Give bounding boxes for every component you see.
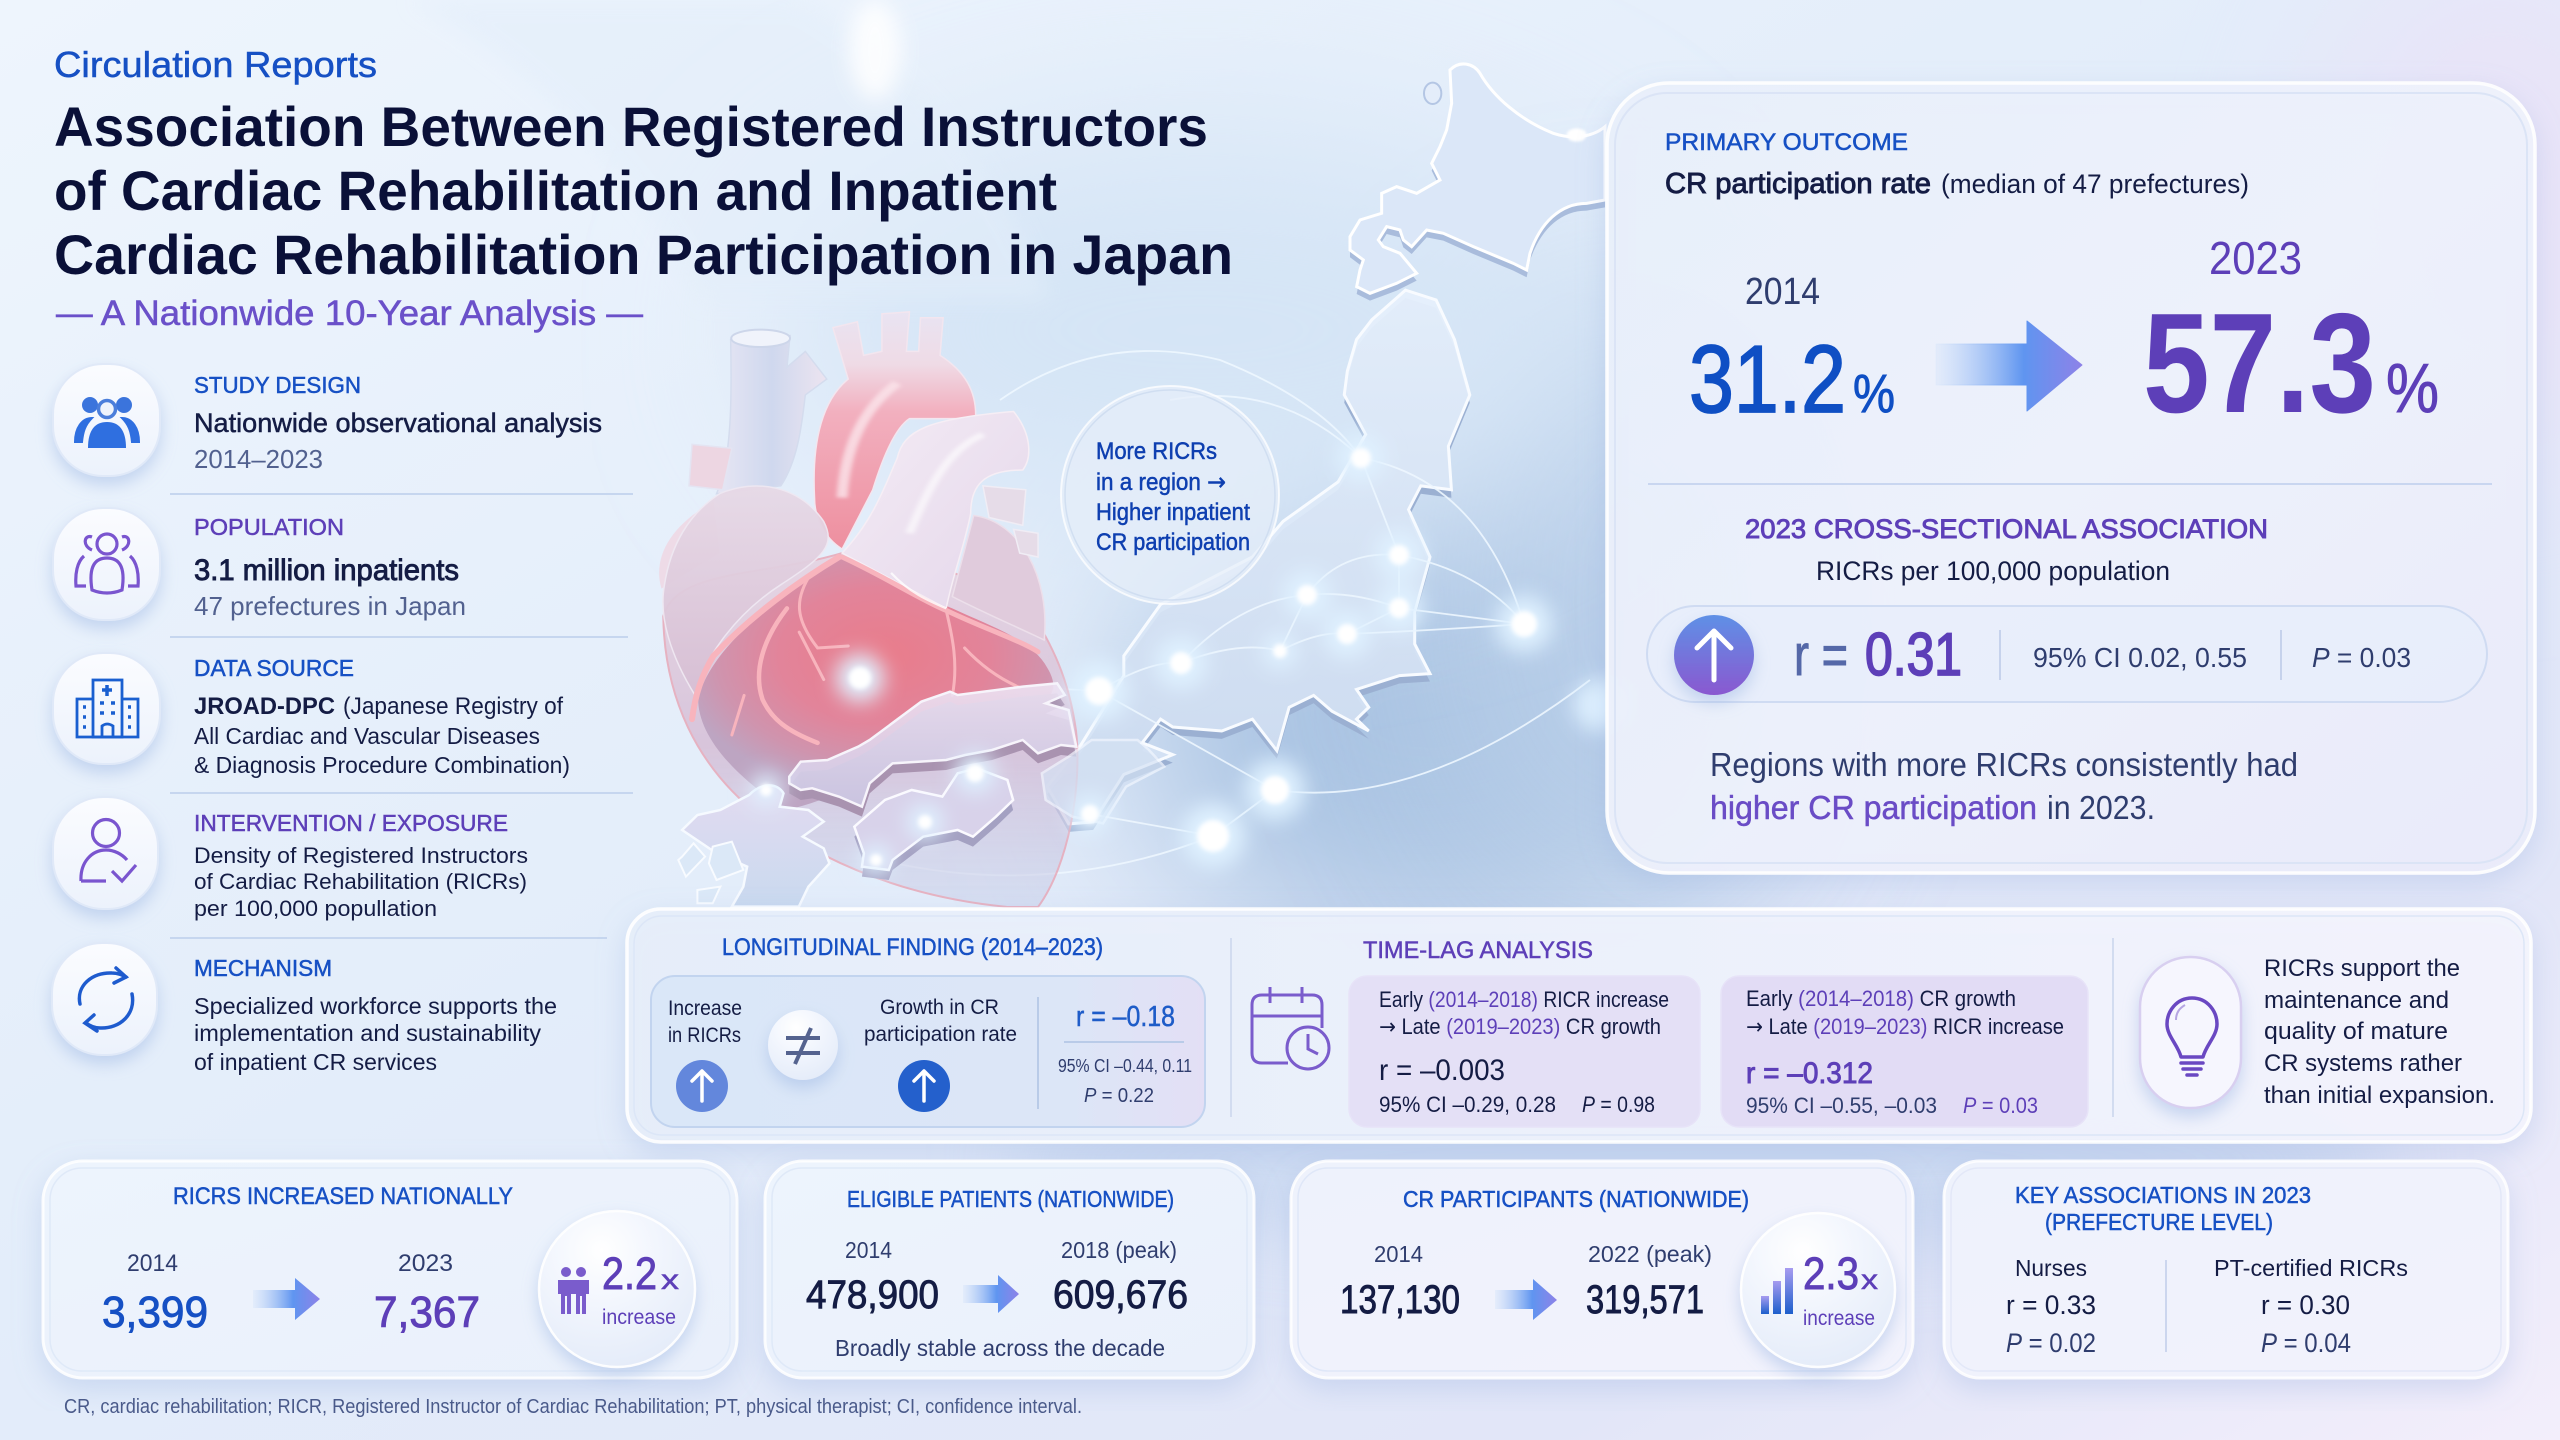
item: population: 3.1 million inpatients [194,554,459,587]
section: longitudinal finding: P = 0.22 [1084,1085,1154,1107]
network arcs [790,351,1590,875]
icon: up arrow circle [1674,615,1754,695]
panel: key associations: r = 0.30 [2261,1290,2350,1320]
map: Chugoku [789,683,1076,807]
badge: 2.3x increase [1741,1213,1895,1367]
map: western Japan islands [678,683,1164,907]
title [54,95,1233,286]
panel: eligible patients: Broadly stable across the decade [835,1335,1165,1361]
heart: vena cava [717,336,827,494]
item: mechanism: MECHANISM [194,955,332,981]
item: intervention / exposure: of Cardiac Rehabilitation (RICRs) [194,869,527,894]
badge: 2.3x increase: increase [1803,1307,1875,1330]
panel: CR participants: 319,571 [1586,1278,1704,1322]
panel: CR participants: 2014 [1374,1241,1423,1267]
callout bubble: more RICRs: in a region → [1096,468,1226,496]
item: intervention / exposure [53,797,528,921]
panel: key associations: (PREFECTURE LEVEL) [2045,1209,2273,1235]
icon: person check [53,797,158,909]
section: longitudinal finding: r = –0.18 [1076,1001,1175,1033]
pill: correlation: 95% CI 0.02, 0.55 [2033,642,2247,673]
heading: cross-sectional association: 2023 CROSS-SECTIONAL ASSOCIATION [1745,514,2268,544]
conclusion text [1710,746,2298,826]
arrow [963,1275,1019,1313]
stat: 2023 rate: 2023 [2209,232,2302,284]
card: early RICR to late CR: r = –0.003 [1379,1054,1505,1087]
heart: aortic arch [814,312,976,549]
stat: 2023 rate: 57.3 [2143,284,2376,443]
icon: hospital [53,653,160,764]
heart: right side lobe [952,515,1045,640]
panel: key associations: P = 0.04 [2261,1328,2351,1358]
heading: cross-sectional association: RICRs per 100,000 population [1816,556,2170,586]
stat: 2023 rate: % [2386,349,2439,427]
section: longitudinal finding [651,934,1205,1127]
panel: RICRs increased nationally [43,1161,737,1378]
pill: correlation: P = 0.03 [2312,642,2411,673]
heart: ventricle core [698,557,1053,810]
section: longitudinal finding: 95% CI –0.44, 0.11 [1058,1056,1192,1076]
panel: CR participants: 137,130 [1340,1278,1460,1322]
panel: eligible patients: 2018 (peak) [1061,1237,1177,1263]
badge: 2.3x increase: x [1861,1264,1878,1295]
badge: 2.3x increase: 2.3 [1803,1248,1859,1299]
panel: key associations: r = 0.33 [2006,1290,2096,1320]
heart: right atrium [663,486,828,695]
network nodes [750,434,1626,876]
item: mechanism: Specialized workforce supports the [194,993,557,1019]
item: data source: DATA SOURCE [194,655,354,681]
panel: RICRs increased nationally: 7,367 [374,1288,480,1337]
panel: key associations: P = 0.02 [2006,1328,2096,1358]
subheading: CR participation rate: (median of 47 prefectures) [1941,169,2249,199]
icon: people group outline [53,508,160,620]
panel: RICRs increased nationally: 2023 [398,1250,453,1277]
icon: not equal [768,1010,838,1080]
conclusion text: higher CR participation [1710,789,2037,826]
heart: coronary vessels [692,557,1038,743]
panel: CR participants [1291,1161,1913,1378]
item: population: 47 prefectures in Japan [194,591,466,621]
panel: CR participants: CR PARTICIPANTS (NATIONWIDE) [1403,1186,1749,1212]
panel: eligible patients [765,1161,1254,1378]
section: longitudinal finding: participation rate [864,1023,1017,1046]
title: Cardiac Rehabilitation Participation in Japan [54,223,1233,286]
panel: primary outcome [1607,83,2535,873]
section: time-lag analysis: TIME-LAG ANALYSIS [1363,937,1593,964]
pill: correlation: 0.31 [1865,621,1962,688]
item: study design [53,364,602,476]
badge: 2.2x increase [539,1211,695,1367]
card: early CR to late RICR: Early (2014–2018) CR growth [1746,986,2016,1011]
item: data source: (Japanese Registry of [343,693,563,720]
callout bubble: more RICRs: Higher inpatient [1096,499,1250,526]
panel: RICRs increased nationally: 2014 [127,1250,178,1277]
stat: 2014 rate: % [1853,364,1895,424]
heart: pulmonary artery [842,412,1029,608]
stat: 2014 rate [1689,271,1895,433]
arrow: 2014 to 2023 [1936,321,2082,411]
conclusion text: in 2023. [2047,789,2155,826]
icon: two people [558,1267,589,1314]
callout bubble: more RICRs: More RICRs [1096,438,1217,465]
callout bubble: more RICRs: CR participation [1096,529,1250,556]
heading: primary outcome: PRIMARY OUTCOME [1665,129,1908,156]
map: Kansai [1042,740,1164,823]
stat: 2014 rate: 2014 [1745,271,1820,313]
pill: correlation: r = [1794,623,1848,688]
takeaway text: CR systems rather [2264,1050,2462,1077]
section: longitudinal finding: Increase [668,997,742,1020]
subtitle: — A Nationwide 10-Year Analysis — [56,294,643,333]
panel: RICRs increased nationally: 3,399 [102,1288,208,1337]
item: mechanism [52,943,557,1075]
subheading: CR participation rate: CR participation rate [1665,168,1931,200]
panel: key associations: KEY ASSOCIATIONS IN 2023 [2015,1182,2311,1208]
section: time-lag analysis [1252,937,2088,1127]
takeaway text: maintenance and [2264,987,2449,1014]
item: intervention / exposure: per 100,000 popullation [194,896,437,921]
panel: eligible patients: 609,676 [1053,1273,1188,1317]
item: data source: All Cardiac and Vascular Diseases [194,723,540,749]
card: early RICR to late CR: Early (2014–2018) RICR increase [1379,987,1669,1012]
icon: calendar clock [1252,987,1329,1069]
panel: key associations [1944,1161,2508,1378]
panel: key associations: PT-certified RICRs [2214,1255,2408,1281]
heart [659,312,1077,907]
icon: lightbulb [2140,957,2241,1108]
footnote: CR, cardiac rehabilitation; RICR, Registered Instructor of Cardiac Rehabilitation; PT, physical therapist; CI, confidence interval. [64,1396,1082,1418]
item: intervention / exposure: Density of Registered Instructors [194,843,528,868]
section: longitudinal finding: in RICRs [668,1024,741,1047]
card: early CR to late RICR: → Late (2019–2023) RICR increase [1746,1014,2064,1040]
panel: eligible patients: 2014 [845,1237,892,1263]
callout bubble: more RICRs [1061,386,1279,604]
takeaway text: RICRs support the [2264,955,2460,982]
icon: up arrow 2 [898,1060,950,1112]
title: Association Between Registered Instructors [54,95,1208,158]
item: study design: STUDY DESIGN [194,372,361,398]
icon: bar chart [1761,1268,1793,1314]
item: mechanism: implementation and sustainability [194,1020,542,1046]
item: population [53,508,466,621]
panel: eligible patients: ELIGIBLE PATIENTS (NATIONWIDE) [847,1186,1174,1212]
stat: 2014 rate: 31.2 [1689,326,1846,433]
illustration: glass map of Japan with heart and network [659,64,1626,907]
conclusion text: Regions with more RICRs consistently had [1710,746,2298,783]
title: of Cardiac Rehabilitation and Inpatient [54,159,1057,222]
panel: key associations: Nurses [2015,1255,2087,1281]
panel: study overview column [52,364,633,1075]
item: data source: & Diagnosis Procedure Combination) [194,752,570,778]
card: early CR to late RICR: r = –0.312 [1746,1057,1873,1090]
heart: main body [663,552,1077,907]
item: mechanism: of inpatient CR services [194,1049,437,1075]
card: early RICR to late CR: → Late (2019–2023) CR growth [1379,1014,1661,1040]
panel: CR participants: 2022 (peak) [1588,1241,1712,1267]
heading: cross-sectional association [1745,514,2268,586]
icon: refresh arrows [52,943,157,1055]
card: early CR to late RICR: 95% CI –0.55, –0.03 [1746,1093,1937,1118]
takeaway text [2264,955,2495,1109]
arrow [253,1278,320,1320]
card: early RICR to late CR [1349,976,1700,1127]
takeaway text: than initial expansion. [2264,1082,2495,1109]
item: data source: JROAD-DPC [194,693,335,720]
panel: RICRs increased nationally: RICRS INCREASED NATIONALLY [173,1183,513,1210]
panel: eligible patients: 478,900 [806,1273,939,1317]
badge: 2.2x increase: 2.2 [602,1248,657,1299]
arrow [1495,1279,1557,1320]
takeaway text: quality of mature [2264,1018,2448,1045]
item: data source [53,653,570,778]
card: early RICR to late CR: 95% CI –0.29, 0.28 [1379,1092,1556,1117]
journal name: Circulation Reports [54,44,377,85]
card: early RICR to late CR: P = 0.98 [1582,1092,1655,1117]
pill: correlation [1647,606,2487,702]
item: study design: Nationwide observational analysis [194,408,602,438]
item: study design: 2014–2023 [194,444,323,474]
card: early CR to late RICR: P = 0.03 [1963,1093,2038,1118]
subheading: CR participation rate [1665,168,2249,200]
map: Chugoku edge [789,693,1076,817]
section: longitudinal finding: Growth in CR [880,996,999,1019]
badge: 2.2x increase: x [661,1264,679,1295]
card: early CR to late RICR [1721,976,2088,1127]
panel: longitudinal and time-lag band [627,909,2531,1142]
map: Kyushu [682,785,829,907]
map: Hokkaido [1350,64,1605,301]
icon: people group filled [53,364,160,476]
icon: up arrow 1 [676,1060,728,1112]
item: intervention / exposure: INTERVENTION / EXPOSURE [194,810,508,836]
map: Shikoku [854,778,1013,880]
badge: 2.2x increase: increase [602,1306,676,1329]
item: population: POPULATION [194,514,344,540]
section: longitudinal finding: LONGITUDINAL FINDING (2014–2023) [722,934,1103,961]
map: Honshu [1047,290,1470,832]
